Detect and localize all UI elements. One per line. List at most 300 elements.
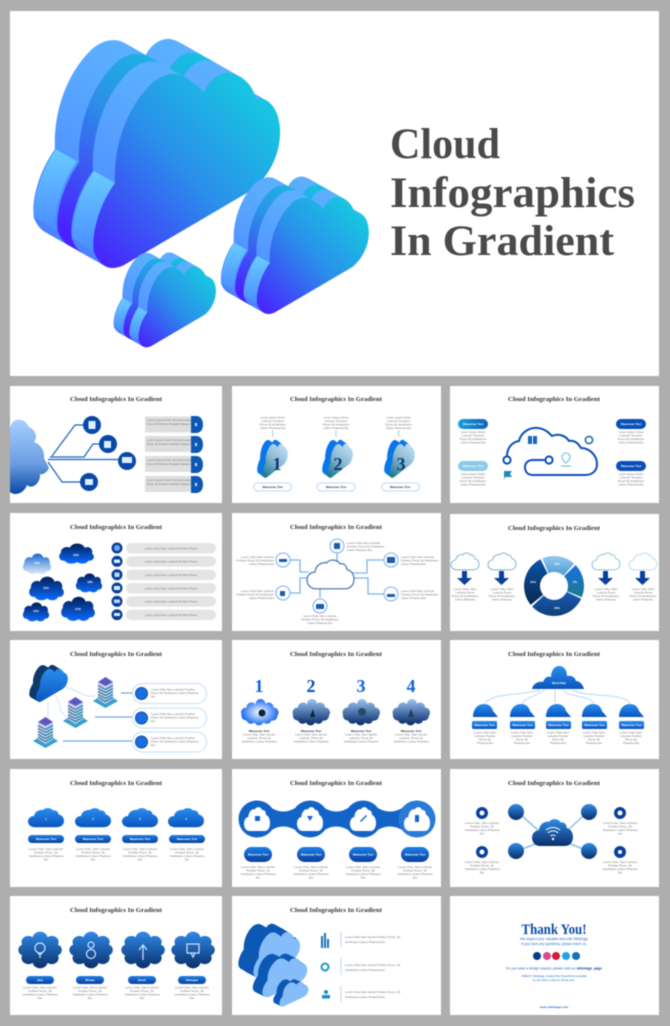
pills (244, 847, 429, 862)
column 1: Lobortis Tincidunt (261, 419, 284, 423)
captions: Lorem Odio, Nam Lobortis (603, 821, 638, 825)
child labels: Purus Sit (479, 738, 491, 742)
captions: Porttitor Purus, Sit (608, 824, 632, 828)
child labels: Pharetra Est (586, 741, 602, 745)
left pills: Libero Pharetra Est (461, 440, 486, 444)
captions: Porttitor Purus, Sit (34, 850, 58, 854)
captions: Est (309, 876, 313, 880)
text pills: Lorem Odio Nam Lobortis Porttitor Purus (145, 586, 198, 590)
captions: Vestibulum Libero Pharetra (603, 828, 638, 832)
donut chart: 35% (554, 562, 560, 566)
node text: Lorem Odio Nam Lobortis (241, 589, 275, 593)
column 1: Purus Sit Vestibulum (259, 422, 287, 426)
connector lines (485, 690, 630, 703)
captions: Lorem Odio, Nam Iaculis (345, 732, 377, 736)
captions: Maecenas Text (401, 729, 421, 733)
pills: Maecenas Text (83, 837, 103, 841)
captions: Vestibulum Libero Pharetra (294, 740, 329, 744)
node text: Porttitor Purus Sit Vestibulum (236, 592, 275, 596)
cloud captions: Libero Pharetra (633, 598, 653, 602)
captions: Vestibulum Libero Pharetra (241, 872, 276, 876)
cloud captions: Purus Sit Vestibulum (593, 594, 620, 598)
node text: Lorem Odio Nam Lobortis (347, 541, 381, 545)
captions: Lorem Odio, Nam Iaculis (395, 732, 427, 736)
panel: slide 10 four flat clouds (10, 769, 222, 887)
credit: for the slide to stay for all the time. (533, 978, 576, 982)
column 2: Maecenas Text (326, 485, 346, 489)
pills: Dialogue (186, 978, 198, 982)
connectors (290, 553, 384, 598)
text pills: Lorem Odio Nam Lobortis Porttitor (151, 712, 195, 716)
node text: Libero Pharetra Est (401, 562, 426, 566)
donut chart: 36% (554, 606, 560, 610)
right pills: Lobortis Tincidunt (620, 476, 643, 480)
column 3: Lorem Ipsum Dolor (386, 416, 411, 420)
captions: Vestibulum Libero Pharetra (346, 872, 381, 876)
captions (23, 986, 210, 1000)
left pills (458, 419, 488, 486)
connector lines (48, 425, 127, 482)
dividers and text: Lorem Odio Nam Iaculis Porttitor Purus, Sit (345, 990, 400, 994)
pills: Maecenas Text (301, 852, 321, 856)
heading: Cloud Infographics In Gradient (290, 524, 383, 531)
heading: Cloud Infographics In Gradient (508, 780, 601, 787)
child labels: Lobortis Porttitor (620, 734, 642, 738)
left pills: Libero Pharetra Est (461, 482, 486, 486)
pills: Idea (37, 978, 43, 982)
cloud captions: Libero Pharetra (492, 598, 512, 602)
top cloud (532, 666, 584, 689)
text pills: Purus Sit Vestibulum Libero Pharetra (151, 740, 199, 744)
panel: slide 8 four numbered clouds (232, 640, 441, 759)
captions: Lorem Odio, Nam Lobortis (76, 847, 111, 851)
icon nodes (476, 807, 626, 858)
right pills: Maecenas Text (621, 422, 641, 426)
illustration: small isometric cloud (114, 252, 216, 347)
column 3: Maecenas Text (390, 485, 410, 489)
captions: Est (618, 832, 622, 836)
captions (29, 847, 205, 862)
child labels: Maecenas Text (474, 723, 495, 727)
captions: Vestibulum Libero Pharetra (125, 992, 160, 996)
flower shapes (18, 932, 215, 968)
heading: Cloud Infographics In Gradient (290, 651, 383, 658)
node icons (279, 543, 395, 609)
captions: Lobortis, Purus Sit (299, 736, 323, 740)
node text: Porttitor Purus Sit Vestibulum (401, 558, 439, 562)
column 2: Libero Pharetra Est (324, 426, 349, 430)
heading: Cloud Infographics In Gradient (70, 396, 163, 403)
captions: Est (140, 996, 144, 1000)
child labels: Pharetra Est (623, 741, 639, 745)
connectors (48, 687, 95, 720)
child labels: Lorem Odio Nam (511, 730, 534, 734)
captions: Vestibulum Libero Pharetra (465, 867, 500, 871)
numbers: 3 (356, 676, 366, 696)
text pills: Purus Sit Vestibulum Libero Pharetra (151, 691, 199, 695)
captions: Lorem Odio, Nam Lobortis (123, 847, 158, 851)
left pills: Lorem Ipsum Dolor (461, 430, 485, 434)
numbers: 2 (306, 676, 316, 696)
node text: Libero Pharetra Est (249, 562, 274, 566)
child labels: Purus Sit (588, 738, 600, 742)
captions: Porttitor Purus, Sit (608, 864, 632, 868)
column 2: Lorem Ipsum Dolor (324, 416, 348, 420)
cloud captions: Lobortis Purus (493, 590, 512, 594)
captions: Est (190, 996, 194, 1000)
captions: Lorem Odio, Nam Lobortis (465, 821, 500, 825)
cloud captions: Lorem Odio, Nam (595, 587, 618, 591)
text pills: Lorem Odio Nam Lobortis Porttitor Purus (145, 546, 198, 550)
right pills: Maecenas Text (621, 464, 641, 468)
dividers and text: Vestibulum Libero Pharetra Est (345, 995, 385, 999)
icons (504, 436, 593, 480)
clouds: 2 (92, 817, 94, 821)
panel: slide 12 wifi cloud (450, 769, 659, 887)
cloud cluster: 18% (87, 580, 93, 584)
top cloud: Word Map (552, 681, 566, 685)
cloud captions: Libero Pharetra (596, 598, 616, 602)
blue nodes (508, 804, 597, 859)
captions: Lorem Odio, Nam Lobortis (175, 986, 210, 990)
node text: Lorem Odio Nam Lobortis (401, 555, 435, 559)
panel: slide 2 numbered clouds (232, 386, 441, 503)
column 3: Purus Sit Vestibulum (385, 422, 413, 426)
column 1: Lorem Ipsum Dolor (260, 416, 285, 420)
right pills: Libero Pharetra Est (619, 440, 644, 444)
captions: Porttitor Purus, Sit (351, 868, 375, 872)
captions: Porttitor Purus, Sit (470, 864, 494, 868)
isometric cloud (29, 665, 68, 702)
captions: Est (88, 996, 92, 1000)
captions: Vestibulum Libero Pharetra (242, 740, 277, 744)
captions: Est (38, 996, 42, 1000)
cloud captions: Libero Pharetra (455, 598, 475, 602)
column 1: 1 (272, 454, 282, 474)
captions: Est (138, 858, 142, 862)
text pills: Est (151, 694, 155, 698)
dividers and text: Lorem Odio Nam Iaculis Porttitor Purus, Sit (345, 935, 400, 939)
heading: Cloud Infographics In Gradient (508, 525, 601, 532)
cloud captions: Lobortis Purus (597, 590, 616, 594)
clouds: 4 (185, 817, 187, 821)
child labels: Lorem Odio Nam (583, 730, 606, 734)
cloud cluster: 35% (73, 553, 79, 557)
title: Cloud (390, 121, 500, 168)
text boxes: Lorem Ipsum Dolor Sit Amet Lobortis Ac (147, 458, 199, 462)
column 1: Maecenas Text (263, 485, 283, 489)
captions: Lorem Odio, Nam Lobortis (23, 986, 58, 990)
column 3 (382, 416, 420, 491)
captions: Maecenas Text (301, 729, 321, 733)
node text: Porttitor Purus Sit Vestibulum (347, 544, 385, 548)
text boxes: Dolor Sit Pretium Facilisis Massa Vel (147, 442, 194, 446)
dividers and text (341, 932, 400, 1002)
title (390, 121, 635, 265)
column 3: Libero Pharetra Est (386, 426, 411, 430)
outline clouds with arrows (451, 553, 657, 585)
wifi cloud (532, 819, 573, 846)
column 3: 3 (396, 454, 406, 474)
child labels: Pharetra Est (550, 741, 566, 745)
captions: Vestibulum Libero Pharetra (465, 828, 500, 832)
captions: Vestibulum Libero Pharetra (603, 867, 638, 871)
cloud captions (452, 587, 657, 602)
cloud captions: Lorem Odio, Nam (491, 587, 514, 591)
node text: Libero Pharetra Est (249, 596, 274, 600)
panel: slide 3 cloud path (450, 386, 659, 503)
numbers (254, 676, 416, 696)
cloud captions: Lobortis Purus (456, 590, 475, 594)
node text: Libero Pharetra Est (347, 548, 372, 552)
captions: Maecenas Text (351, 729, 371, 733)
child labels: Lorem Odio Nam (547, 730, 570, 734)
column 3: Lobortis Tincidunt (387, 419, 410, 423)
illustration: medium isometric cloud (221, 177, 369, 314)
cloud captions: Lobortis Purus (634, 590, 653, 594)
message: We respect your valuable idea with SlideEgg! (520, 937, 588, 941)
captions (465, 821, 638, 874)
text pills: Lorem Odio Nam Lobortis Porttitor (151, 736, 195, 740)
flower icons (35, 942, 199, 960)
child labels: Maecenas Text (548, 723, 569, 727)
captions: Vestibulum Libero Pharetra (394, 740, 429, 744)
column 1 (254, 416, 292, 491)
node text: Libero Pharetra Est (308, 621, 333, 625)
pills: Maecenas Text (353, 852, 373, 856)
panel: cover (10, 11, 659, 376)
captions (242, 729, 429, 744)
icon circles (80, 416, 136, 491)
child labels: Lorem Odio Nam (620, 730, 643, 734)
captions: Lorem Odio, Nam Lobortis (241, 865, 276, 869)
captions: Est (413, 876, 417, 880)
left pills: Maecenas Text (463, 422, 483, 426)
captions: Porttitor Purus, Sit (78, 989, 102, 993)
heading: Cloud Infographics In Gradient (290, 907, 383, 914)
captions: Porttitor Purus, Sit (81, 850, 105, 854)
cloud cluster: 34% (43, 586, 49, 590)
captions: Est (44, 858, 48, 862)
column 2: Purus Sit Vestibulum (323, 422, 350, 426)
pills: Maecenas Text (177, 837, 197, 841)
servers (33, 677, 118, 748)
text pills: Lorem Odio Nam Lobortis Porttitor Purus (145, 613, 198, 617)
child labels: Purus Sit (516, 738, 528, 742)
left pills: Lobortis Tincidunt (462, 434, 485, 438)
child labels: Lobortis Porttitor (474, 734, 496, 738)
captions: Porttitor Purus, Sit (403, 868, 427, 872)
child labels (474, 723, 643, 745)
chain (238, 800, 436, 838)
pills: Maecenas Text (130, 837, 150, 841)
captions: Vestibulum Libero Pharetra (344, 740, 379, 744)
captions: Porttitor Purus, Sit (246, 868, 270, 872)
right pills: Lorem Ipsum Dolor (619, 430, 643, 434)
captions: Lorem Odio, Nam Iaculis (295, 732, 327, 736)
arrows (63, 693, 132, 741)
isometric clouds (238, 924, 308, 1006)
right pills (616, 419, 646, 486)
panel: slide 14 stacked clouds (232, 896, 441, 1015)
node text: Lorem Odio Nam Lobortis (303, 614, 337, 618)
text pills: Purus Sit Vestibulum Libero Pharetra (151, 716, 199, 720)
website: www.slidekage.com (539, 1005, 569, 1009)
captions: Lobortis, Purus Sit (399, 736, 423, 740)
title: Infographics (390, 170, 635, 217)
clouds: 1 (45, 817, 47, 821)
text pills (132, 684, 206, 752)
captions: Est (256, 876, 260, 880)
captions: Vestibulum Libero Pharetra (123, 854, 158, 858)
captions (241, 865, 433, 880)
captions: Lorem Odio, Nam Lobortis (294, 865, 329, 869)
scalloped clouds (241, 699, 430, 725)
captions: Porttitor Purus, Sit (180, 989, 204, 993)
text boxes: Lorem Ipsum Dolor Sit Amet Lobortis Ac (147, 438, 199, 442)
heading: Cloud Infographics In Gradient (508, 396, 601, 403)
captions: Porttitor Purus, Sit (128, 850, 152, 854)
text pills (126, 543, 216, 620)
text pills: Lorem Odio Nam Lobortis Porttitor (151, 688, 195, 692)
clouds: 3 (139, 817, 141, 821)
captions: Vestibulum Libero Pharetra (23, 992, 58, 996)
captions: Vestibulum Libero Pharetra (76, 854, 111, 858)
node text: Libero Pharetra Est (401, 596, 426, 600)
right pills: Purus Sit Vestibulum (618, 437, 645, 441)
node circles (276, 539, 398, 613)
cloud cluster: 16% (33, 609, 39, 613)
captions: Est (618, 870, 622, 874)
right pills: Lorem Ipsum Dolor (619, 472, 643, 476)
left pills: Lobortis Tincidunt (462, 476, 485, 480)
cloud captions: Purus Sit Vestibulum (630, 594, 657, 598)
captions: Vestibulum Libero Pharetra (29, 854, 64, 858)
cloud cluster: 15% (34, 561, 40, 565)
panel: slide 4 percentage clouds (10, 513, 222, 631)
central cloud outline (307, 560, 354, 589)
captions: Est (480, 870, 484, 874)
social icons (533, 952, 580, 960)
captions: Lorem Odio, Nam Iaculis (243, 732, 275, 736)
cloud outline path (503, 428, 597, 475)
text pills: Lorem Odio Nam Lobortis Porttitor Purus (145, 600, 198, 604)
captions: Lorem Odio, Nam Lobortis (346, 865, 381, 869)
heading: Cloud Infographics In Gradient (508, 651, 601, 658)
dividers and text: Lorem Odio Nam Iaculis Porttitor Purus, Sit (345, 963, 400, 967)
cloud cluster (23, 543, 102, 621)
captions: Porttitor Purus, Sit (299, 868, 323, 872)
row icons (321, 933, 330, 998)
column 2: Lobortis Tincidunt (325, 419, 348, 423)
heading: Cloud Infographics In Gradient (290, 396, 383, 403)
heading: Cloud Infographics In Gradient (70, 651, 163, 658)
panel: slide 9 word map (450, 640, 659, 759)
child labels: Maecenas Text (512, 723, 533, 727)
captions: Lorem Odio, Nam Lobortis (170, 847, 205, 851)
captions: Vestibulum Libero Pharetra (175, 992, 210, 996)
pills (28, 835, 205, 843)
donut chart: 31% (530, 580, 536, 584)
node text (236, 541, 439, 625)
cloud (10, 420, 49, 494)
clouds (28, 808, 204, 827)
captions: Est (480, 832, 484, 836)
pills: Bond (138, 978, 146, 982)
donut chart (524, 556, 584, 616)
captions: Porttitor Purus, Sit (175, 850, 199, 854)
child labels: Lobortis Porttitor (547, 734, 569, 738)
child labels: Lobortis Porttitor (511, 734, 533, 738)
panel: slide 7 servers (10, 640, 222, 759)
donut chart: 5% (573, 580, 578, 584)
captions: Vestibulum Libero Pharetra (294, 872, 329, 876)
cloud captions: Lorem Odio, Nam (454, 587, 477, 591)
text boxes (145, 416, 203, 493)
captions: Lorem Odio, Nam Lobortis (465, 860, 500, 864)
links (522, 816, 583, 849)
captions: Lobortis, Purus Sit (247, 736, 271, 740)
right pills: Lobortis Tincidunt (620, 434, 643, 438)
child labels: Lorem Odio Nam (474, 730, 497, 734)
child labels: Pharetra Est (514, 741, 530, 745)
panel: slide 5 cloud network (232, 513, 441, 631)
text boxes: Lorem Ipsum Dolor Sit Amet Lobortis Ac (147, 418, 199, 422)
panel: slide 1 data hub (10, 386, 222, 503)
pills: Maecenas Text (36, 837, 56, 841)
left pills: Purus Sit Vestibulum (460, 479, 487, 483)
captions: Est (361, 876, 365, 880)
node text: Porttitor Purus Sit Vestibulum (401, 592, 439, 596)
request line: Do you have a design request, please visit our slidekage_page (506, 966, 602, 970)
title: In Gradient (390, 218, 615, 265)
text boxes: Lorem Ipsum Dolor Sit Amet Lobortis Ac (147, 478, 199, 482)
node text: Lorem Odio Nam Lobortis (241, 555, 275, 559)
pills: Maecenas Text (405, 852, 425, 856)
pills (26, 976, 206, 984)
pills: Maecenas Text (248, 852, 268, 856)
right pills: Purus Sit Vestibulum (618, 479, 645, 483)
child labels: Purus Sit (552, 738, 564, 742)
numbers: 4 (406, 676, 416, 696)
captions: Porttitor Purus, Sit (470, 824, 494, 828)
text pills: Est (151, 719, 155, 723)
panel: slide 15 thank you (450, 896, 659, 1015)
captions: Lorem Odio, Nam Lobortis (603, 860, 638, 864)
text pills: Lorem Odio Nam Lobortis Porttitor Purus (145, 560, 198, 564)
captions: Lorem Odio, Nam Lobortis (73, 986, 108, 990)
node text: Lorem Odio Nam Lobortis (401, 589, 435, 593)
panel: slide 13 flower clouds (10, 896, 222, 1015)
text boxes: Dolor Sit Pretium Facilisis Massa Vel (147, 422, 194, 426)
node text: Porttitor Purus Sit Vestibulum (301, 618, 339, 622)
credit: CREDIT: SlideEgg, created this PowerPoint template (521, 974, 587, 978)
captions: Lorem Odio, Nam Lobortis (29, 847, 64, 851)
left pills: Purus Sit Vestibulum (460, 437, 487, 441)
heading: Cloud Infographics In Gradient (70, 780, 163, 787)
column 2 (317, 416, 355, 491)
captions: Lorem Odio, Nam Lobortis (125, 986, 160, 990)
cloud captions: Purus Sit Vestibulum (452, 594, 479, 598)
child labels: Lobortis Porttitor (583, 734, 605, 738)
captions: Porttitor Purus, Sit (130, 989, 154, 993)
text pills: Lorem Odio Nam Lobortis Porttitor Purus (145, 573, 198, 577)
heading: Cloud Infographics In Gradient (290, 780, 383, 787)
captions: Maecenas Text (249, 729, 269, 733)
cloud cluster: 21% (75, 607, 81, 611)
text boxes: Dolor Sit Pretium Facilisis Massa Vel (147, 462, 194, 466)
child shapes (472, 704, 644, 729)
